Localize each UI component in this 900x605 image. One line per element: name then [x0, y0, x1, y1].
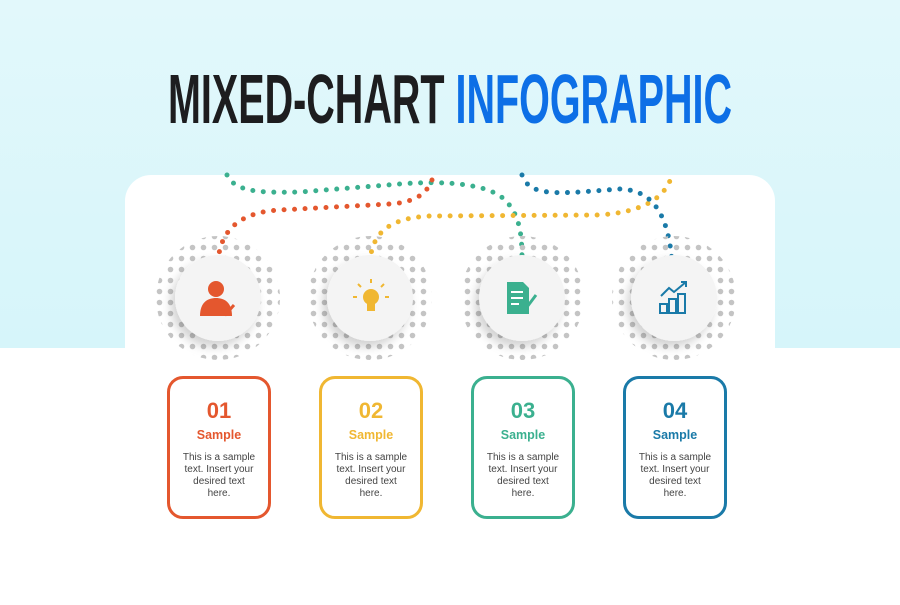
icon circle 2: [308, 236, 432, 360]
card 02: This is a sample: [335, 452, 407, 463]
connector: blue: [522, 175, 672, 262]
icon circle 1: [156, 236, 280, 360]
card 04: 04: [663, 398, 687, 423]
icon circle 3: [460, 236, 584, 360]
card 01: Sample: [197, 428, 241, 442]
icon circle 4: [612, 236, 736, 360]
card 04: text. Insert your: [641, 464, 709, 475]
connector: green: [227, 175, 522, 260]
card 03: [471, 376, 575, 519]
card 04: [623, 376, 727, 519]
card 01: here.: [208, 488, 230, 499]
card 04: here.: [664, 488, 686, 499]
card 01: 01: [207, 398, 231, 423]
card 02: 02: [359, 398, 383, 423]
connector: yellow: [370, 175, 672, 262]
card 03: 03: [511, 398, 535, 423]
icon: document: [507, 282, 536, 314]
card 03: text. Insert your: [489, 464, 557, 475]
connector: red: [218, 180, 432, 262]
icon: bar chart: [660, 282, 686, 313]
card 02: [319, 376, 423, 519]
card 02: text. Insert your: [337, 464, 405, 475]
card 01: [167, 376, 271, 519]
card 01: This is a sample: [183, 452, 255, 463]
icon: person: [200, 281, 234, 316]
card 03: here.: [512, 488, 534, 499]
card 03: desired text: [497, 476, 549, 487]
icon: lightbulb: [353, 279, 389, 311]
card 04: desired text: [649, 476, 701, 487]
card 03: Sample: [501, 428, 545, 442]
card 02: here.: [360, 488, 382, 499]
card 04: Sample: [653, 428, 697, 442]
card 01: desired text: [193, 476, 245, 487]
card 02: Sample: [349, 428, 393, 442]
card 03: This is a sample: [487, 452, 559, 463]
card 01: text. Insert your: [185, 464, 253, 475]
card 02: desired text: [345, 476, 397, 487]
card 04: This is a sample: [639, 452, 711, 463]
